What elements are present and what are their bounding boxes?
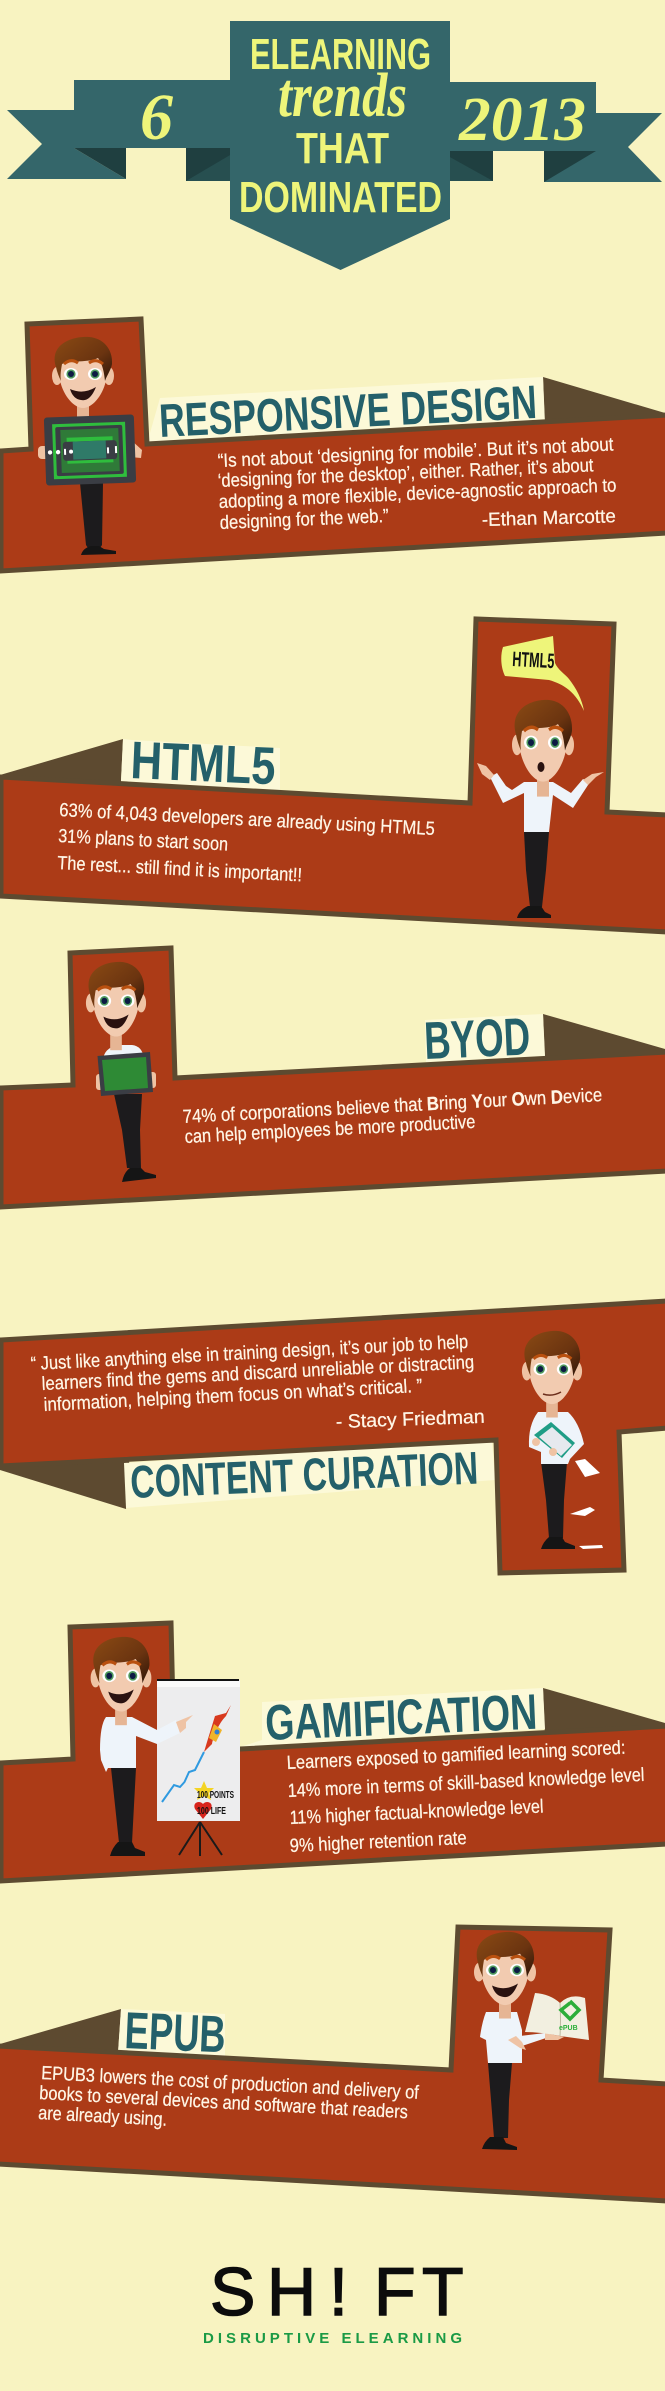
open book: ePUB: [559, 2025, 578, 2032]
speech bubble: [501, 636, 584, 711]
speech bubble: HTML5: [512, 648, 555, 673]
ribbon middle: [74, 21, 596, 270]
ribbon left tail: [7, 110, 126, 179]
section: html5: [0, 619, 665, 932]
description: [38, 2063, 420, 2131]
character with book and papers: [522, 1331, 603, 1549]
points star: 100 POINTS: [197, 1790, 234, 1801]
red band: [1, 619, 665, 932]
tripod: [179, 1822, 222, 1856]
ribbon fold: [543, 1688, 665, 1737]
ribbon fold: [0, 739, 123, 790]
heading: BYOD: [423, 1007, 531, 1071]
statistic: [182, 1085, 603, 1148]
epub logo: [561, 2001, 579, 2019]
header banner: [7, 21, 662, 270]
quote: designing for the web.”: [219, 506, 389, 534]
section: byod: [1, 948, 665, 1207]
quote: adopting a more flexible, device-agnostic approach to: [218, 475, 617, 513]
attribution: - Stacy Friedman: [335, 1407, 485, 1433]
tagline: DISRUPTIVE ELEARNING: [203, 2330, 462, 2347]
statistics: 63% of 4,043 developers are already using HTML5: [59, 800, 435, 840]
character with responsive tablet: [38, 337, 142, 555]
attribution: -Ethan Marcotte: [482, 506, 616, 531]
life heart: [194, 1802, 226, 1819]
ribbon right tail: [544, 113, 662, 182]
growth line: [162, 1752, 204, 1802]
sleeve over chart: [157, 1720, 180, 1744]
headline: trends: [278, 62, 407, 130]
statistics: [286, 1738, 645, 1857]
hands: [38, 440, 142, 459]
quote: “Is not about ‘designing for mobile’. But it’s not about: [217, 434, 615, 472]
red band: [1, 948, 665, 1207]
description: EPUB3 lowers the cost of production and delivery of: [41, 2063, 420, 2104]
section: content curation: [0, 1301, 665, 1573]
statistics: 11% higher factual-knowledge level: [289, 1796, 544, 1829]
section: gamification: [1, 1623, 665, 1881]
red band: [1, 319, 665, 571]
logo: [203, 2254, 464, 2347]
statistics: 9% higher retention rate: [289, 1828, 467, 1857]
red band: [0, 1927, 665, 2201]
description: books to several devices and software that readers: [39, 2083, 408, 2123]
life heart: 100 LIFE: [197, 1806, 226, 1817]
heading: HTML5: [129, 731, 277, 796]
wordmark: SH!FT: [210, 2254, 464, 2330]
title backing: [240, 1688, 545, 1747]
quote: information, helping them focus on what’s critical. ”: [43, 1376, 423, 1416]
character with book: [474, 1932, 589, 2150]
year 2013: 2013: [458, 86, 586, 154]
heading: CONTENT CURATION: [129, 1441, 479, 1508]
quote: [217, 434, 617, 534]
number 6: 6: [140, 81, 173, 154]
title backing: [124, 1441, 495, 1508]
heading: EPUB: [123, 2002, 227, 2064]
headline: THAT: [296, 124, 389, 173]
rocket: [204, 1705, 231, 1752]
statistic: 74% of corporations believe that Bring Your Own Device: [182, 1085, 603, 1128]
title backing: [148, 377, 545, 444]
flipchart: [157, 1679, 240, 1856]
headline: DOMINATED: [239, 173, 442, 222]
red band: [1, 1301, 665, 1573]
headline: [239, 30, 442, 222]
section: responsive design: [1, 319, 665, 571]
ribbon fold: [543, 1014, 665, 1062]
points star: [194, 1781, 234, 1801]
statistics: [57, 800, 435, 886]
statistics: 31% plans to start soon: [58, 826, 229, 856]
character shrugging: [477, 700, 604, 918]
title backing: [121, 739, 280, 790]
red band: [1, 1623, 665, 1881]
title backing: [118, 2009, 225, 2060]
ribbon fold: [0, 1450, 130, 1509]
section: epub: [0, 1927, 665, 2201]
statistic: can help employees be more productive: [184, 1112, 476, 1148]
quote: ‘designing for the desktop’, either. Rather, it’s about: [217, 455, 595, 492]
ribbon fold: [543, 377, 665, 430]
open book: [525, 1993, 589, 2040]
quote: learners find the gems and discard unreliable or distracting: [41, 1352, 475, 1395]
title backing: [425, 1014, 545, 1062]
ribbon fold: [0, 2009, 121, 2060]
ribbon folds: [74, 148, 596, 182]
description: are already using.: [38, 2103, 168, 2131]
statistics: The rest... still find it is important!!: [57, 853, 302, 886]
heading: GAMIFICATION: [264, 1684, 538, 1751]
tablet: [44, 414, 136, 486]
falling papers: [570, 1459, 603, 1549]
tablet: [98, 1052, 153, 1096]
pointing hand: [176, 1715, 193, 1733]
book: [532, 1422, 575, 1458]
heading: RESPONSIVE DESIGN: [158, 375, 538, 447]
quote: [30, 1332, 475, 1416]
headline: ELEARNING: [250, 30, 431, 79]
character with tablet: [86, 962, 156, 1182]
quote: “ Just like anything else in training design, it’s our job to help: [30, 1332, 469, 1375]
character pointing: [91, 1637, 180, 1856]
